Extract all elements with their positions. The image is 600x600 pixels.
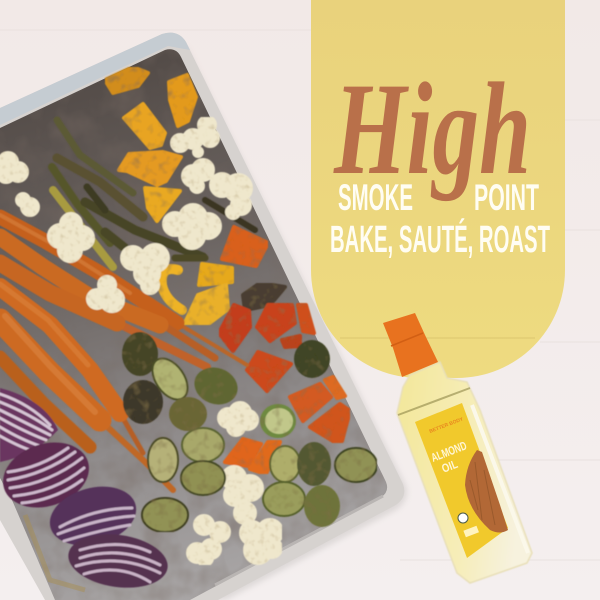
product name bbox=[429, 438, 474, 478]
label bbox=[415, 403, 508, 558]
yellow and orange peppers bbox=[105, 67, 268, 325]
red peppers bbox=[219, 283, 350, 474]
product name: ALMOND bbox=[429, 438, 469, 465]
cauliflower florets bbox=[0, 117, 282, 565]
subheading: point: POINT bbox=[474, 177, 539, 218]
baking tray bbox=[0, 33, 407, 600]
yellow banner bbox=[311, 0, 565, 378]
almond oil bottle bbox=[383, 313, 532, 583]
roasted vegetables bbox=[0, 67, 377, 594]
product name: OIL bbox=[440, 457, 460, 476]
brand logo: BETTER BODY bbox=[429, 416, 465, 435]
subheading: smoke: SMOKE bbox=[338, 177, 413, 218]
organic seal bbox=[458, 513, 468, 523]
brussels sprouts bbox=[122, 332, 377, 532]
almond illustration bbox=[465, 450, 508, 532]
bottle body bbox=[397, 362, 532, 583]
green beans bbox=[52, 120, 255, 267]
small badge bbox=[463, 526, 479, 537]
carrots bbox=[0, 215, 247, 490]
bottle cap bbox=[383, 313, 438, 377]
red onions bbox=[0, 388, 171, 594]
